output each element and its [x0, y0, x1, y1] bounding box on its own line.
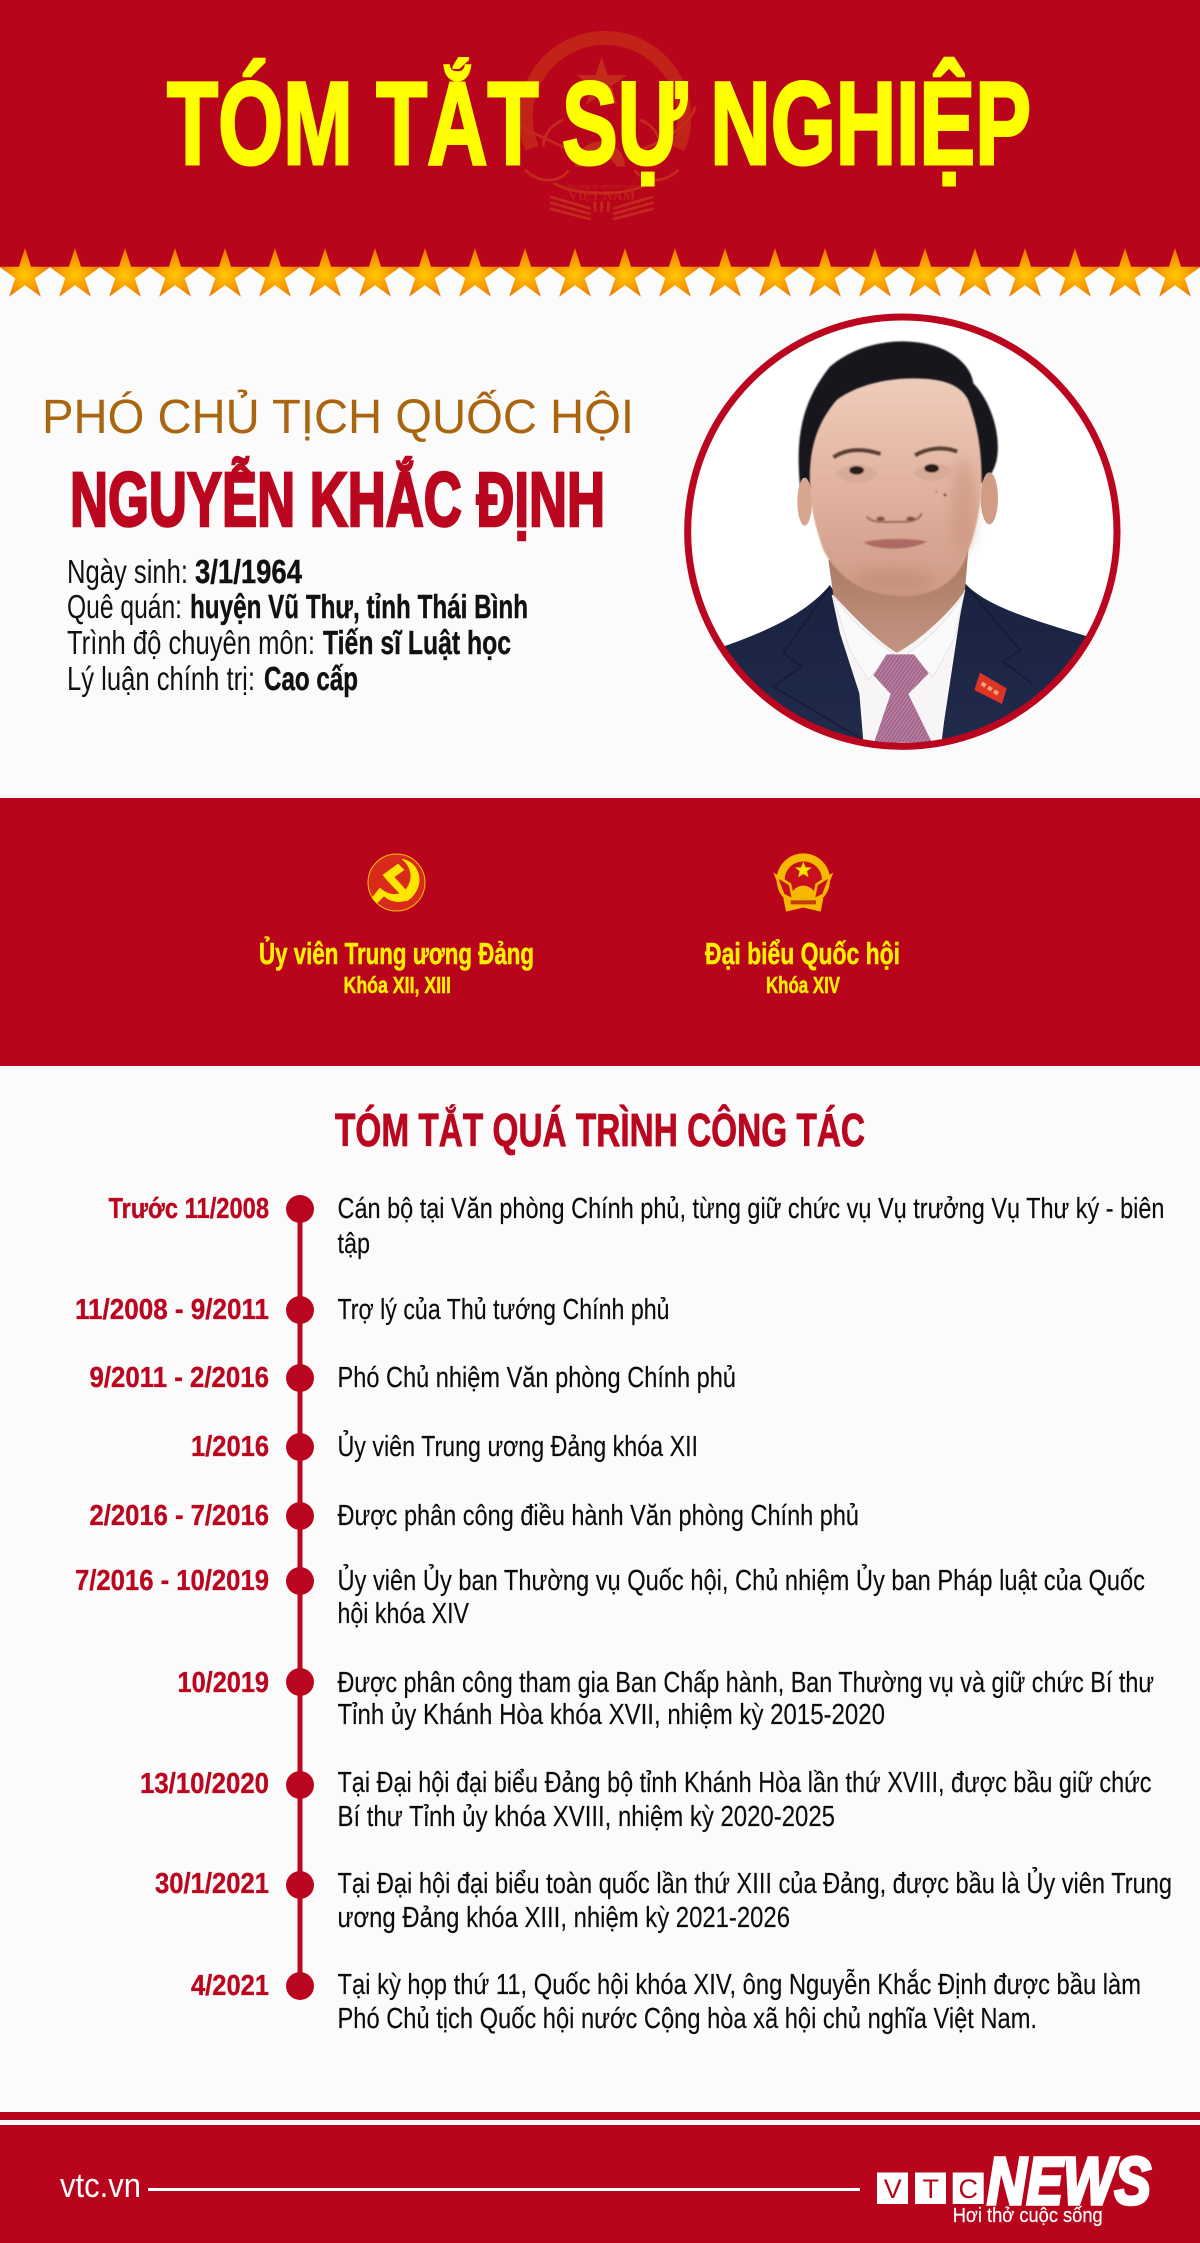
hair: [799, 341, 998, 490]
face: [810, 378, 982, 596]
logo: VTC News: C: [958, 2174, 978, 2204]
timeline entry 4: [191, 1429, 698, 1463]
logo: VTC News: T: [922, 2174, 939, 2204]
watermark: national emblem: [520, 38, 695, 219]
profile facts: Cao cấp: [264, 660, 358, 697]
timeline entry 9: ương Đảng khóa XIII, nhiệm kỳ 2021-2026: [338, 1902, 790, 1934]
timeline entry 10: 4/2021: [191, 1970, 269, 2002]
timeline entry 7: Tỉnh ủy Khánh Hòa khóa XVII, nhiệm kỳ 2015-2020: [338, 1699, 885, 1731]
lapel pin: [974, 673, 1007, 704]
footer site url: vtc.vn: [60, 2167, 141, 2205]
label: party committee: Ủy viên Trung ương Đảng: [259, 935, 534, 971]
timeline entry 9: [155, 1866, 1172, 1934]
panel: footer: [0, 2112, 1200, 2243]
shirt: [832, 590, 965, 742]
timeline entry 5: [90, 1500, 859, 1532]
ears: [797, 478, 812, 526]
timeline entry 1: [108, 1193, 1164, 1260]
profile facts: Ngày sinh:: [67, 553, 188, 590]
timeline entry 4: Ủy viên Trung ương Đảng khóa XII: [338, 1429, 698, 1463]
profile facts: huyện Vũ Thư, tỉnh Thái Bình: [190, 588, 528, 625]
emblem lettering: CỘNG HÒA XÃ HỘI CHỦ NGHĨA: [564, 182, 640, 190]
logo: VTC News: [877, 2144, 1151, 2227]
panel: header banner: [0, 0, 1200, 267]
profile facts: 3/1/1964: [195, 553, 303, 590]
timeline entry 6: [75, 1563, 1145, 1630]
position heading: PHÓ CHỦ TỊCH QUỐC HỘI: [42, 389, 634, 444]
timeline entry 8: [140, 1767, 1152, 1833]
timeline entry 4: 1/2016: [191, 1431, 269, 1463]
heading: work history: TÓM TẮT QUÁ TRÌNH CÔNG TÁC: [335, 1104, 865, 1156]
logo: VTC News: NEWS: [987, 2144, 1151, 2219]
logo: VTC News: Hơi thở cuộc sống: [953, 2205, 1103, 2227]
collar: [833, 590, 965, 680]
label: party committee: [259, 935, 534, 998]
profile facts: Quê quán:: [67, 588, 182, 625]
timeline entry 2: Trợ lý của Thủ tướng Chính phủ: [338, 1294, 670, 1326]
name heading: NGUYỄN KHẮC ĐỊNH: [70, 456, 605, 543]
timeline entry 7: [178, 1667, 1154, 1731]
decorative star row: [0, 248, 1200, 297]
timeline entry 6: hội khóa XIV: [338, 1598, 470, 1630]
portrait photo: [688, 317, 1117, 773]
timeline entry 1: Trước 11/2008: [108, 1193, 269, 1225]
timeline entry 1: tập: [338, 1228, 370, 1260]
timeline entry 2: [75, 1294, 670, 1326]
profile facts: [67, 553, 528, 697]
tie: [873, 654, 929, 694]
emblem lettering: [564, 182, 640, 202]
timeline entry 5: Được phân công điều hành Văn phòng Chính phủ: [338, 1500, 859, 1532]
timeline entry 8: Bí thư Tỉnh ủy khóa XVIII, nhiệm kỳ 2020-2025: [338, 1801, 835, 1833]
panel: memberships band: [0, 798, 1200, 1066]
profile facts: Trình độ chuyên môn:: [67, 624, 315, 661]
timeline entry 10: [191, 1968, 1141, 2035]
chart: timeline: [75, 1193, 1172, 2035]
profile facts: Tiến sĩ Luật học: [323, 624, 511, 661]
timeline entry 2: 11/2008 - 9/2011: [75, 1294, 269, 1326]
panel: profile: [42, 317, 1117, 773]
timeline entry 9: 30/1/2021: [155, 1868, 269, 1900]
portrait ring: [688, 317, 1117, 746]
icon: national emblem: [776, 857, 831, 912]
icon: party emblem: [368, 854, 425, 911]
neck: [828, 550, 968, 653]
label: national assembly: Đại biểu Quốc hội: [705, 936, 900, 971]
timeline entry 3: 9/2011 - 2/2016: [90, 1362, 269, 1394]
timeline entry 5: 2/2016 - 7/2016: [90, 1500, 269, 1532]
timeline entry 6: 7/2016 - 10/2019: [75, 1565, 269, 1597]
timeline entry 3: [90, 1362, 736, 1394]
suit: [724, 584, 1086, 743]
emblem lettering: VIỆT NAM: [568, 188, 635, 202]
logo: VTC News: V: [884, 2174, 902, 2204]
label: national assembly: Khóa XIV: [766, 972, 840, 998]
timeline entry 10: Phó Chủ tịch Quốc hội nước Cộng hòa xã hội chủ nghĩa Việt Nam.: [338, 2003, 1037, 2035]
label: national assembly: [705, 936, 900, 998]
profile facts: Lý luận chính trị:: [67, 660, 255, 697]
timeline entry 8: 13/10/2020: [140, 1768, 269, 1800]
timeline entry 7: 10/2019: [178, 1667, 269, 1699]
timeline entry 3: Phó Chủ nhiệm Văn phòng Chính phủ: [338, 1362, 736, 1394]
label: party committee: Khóa XII, XIII: [344, 972, 451, 998]
